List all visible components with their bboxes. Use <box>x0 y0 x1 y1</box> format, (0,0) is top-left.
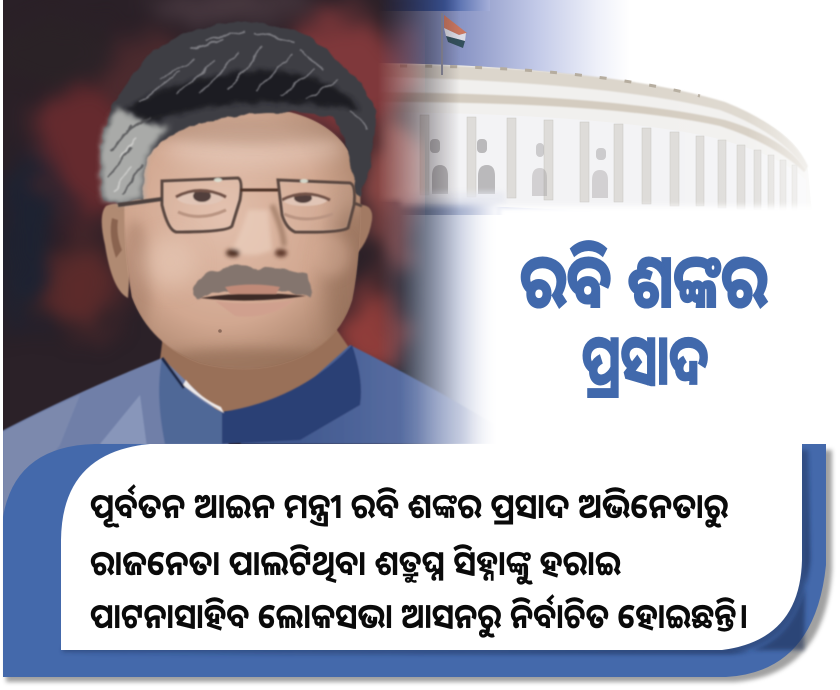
coat <box>3 344 478 517</box>
description text: ରାଜନେତା ପାଲଟିଥିବା ଶତ୍ରୁଘ୍ନ ସିହ୍ନାଙ୍କୁ ହରାଇ <box>90 543 621 586</box>
eyes <box>176 190 333 219</box>
panel: blue backing with shadow <box>3 444 832 682</box>
panel: sky gradient behind the parliament <box>300 0 630 215</box>
nose <box>226 205 287 257</box>
title: name of the politician: ରବି ଶଙ୍କର <box>520 240 768 324</box>
glasses <box>118 178 362 232</box>
neck <box>159 330 348 412</box>
panel: lower blue fade under the parliament <box>300 192 828 446</box>
chin mark <box>218 329 222 333</box>
description text: ପାଟନାସାହିବ ଲୋକସଭା ଆସନରୁ ନିର୍ବାଚିତ ହୋଇଛନ୍ତି। <box>90 594 748 639</box>
panel: white text card with shadow <box>61 444 810 654</box>
description text: ପୂର୍ବତନ ଆଇନ ମନ୍ତ୍ରୀ ରବି ଶଙ୍କର ପ୍ରସାଦ ଅଭିନେତାରୁ <box>90 483 728 529</box>
moustache <box>193 266 311 300</box>
face <box>124 111 362 369</box>
icon: flag on parliament <box>441 13 467 75</box>
description text <box>90 483 748 639</box>
ears <box>102 204 372 298</box>
image: parliament building <box>382 63 808 208</box>
title: name of the politician: ପ୍ରସାଦ <box>582 321 709 399</box>
title: name of the politician <box>520 240 768 399</box>
image: portrait photo <box>0 0 500 530</box>
hair <box>100 23 375 204</box>
white fade over right side of portrait <box>400 215 501 445</box>
lips <box>200 284 306 317</box>
portrait background <box>0 0 500 444</box>
